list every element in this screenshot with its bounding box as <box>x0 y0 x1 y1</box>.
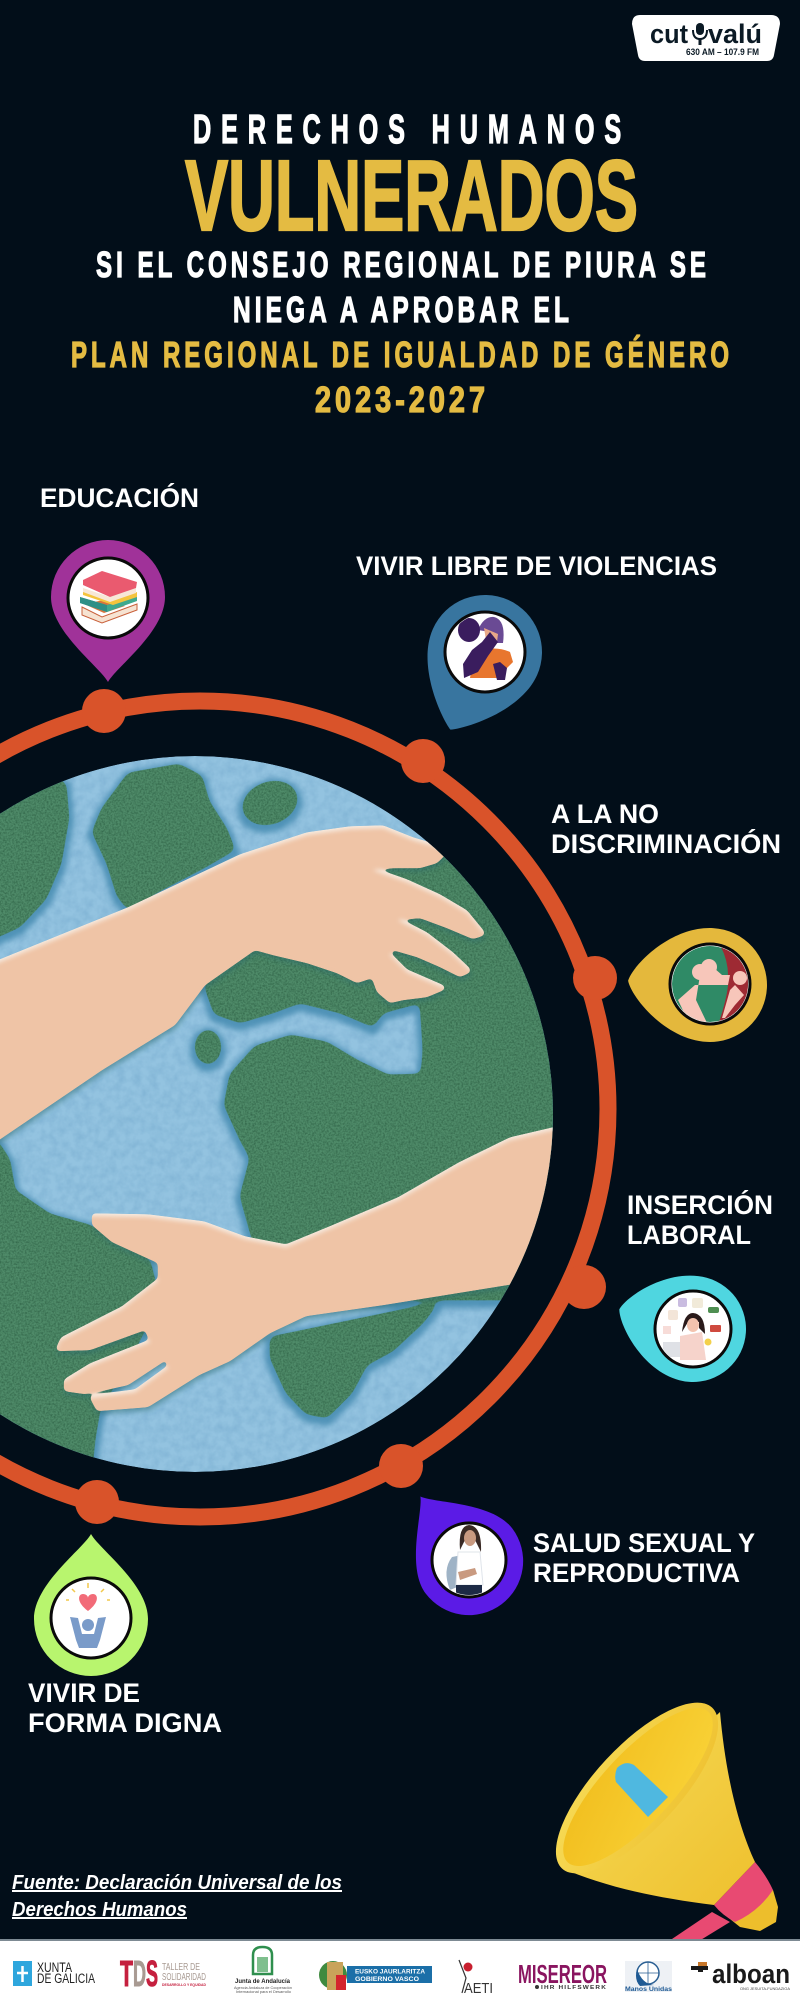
land masses <box>0 764 553 1458</box>
logo: Taller de Solidaridad: SOLIDARIDAD <box>162 1972 206 1983</box>
label: vivir de forma digna <box>28 1678 222 1738</box>
logo: Taller de Solidaridad: S <box>146 1953 158 1994</box>
logo: Eusko Jaurlaritza: EUSKO JAURLARITZA <box>355 1968 425 1976</box>
logo: Misereor: IHR HILFSWERK <box>541 1985 607 1991</box>
label: salud sexual y reproductiva: REPRODUCTIVA <box>533 1558 740 1588</box>
logo: Alboan: alboan <box>712 1959 790 1989</box>
label: educación: EDUCACIÓN <box>40 482 199 513</box>
node: no discriminación <box>573 956 617 1000</box>
logo: Eusko Jaurlaritza: GOBIERNO VASCO <box>355 1976 419 1983</box>
label: vivir de forma digna: VIVIR DE <box>28 1678 140 1708</box>
node: violencias <box>401 739 445 783</box>
logo: Taller de Solidaridad: T <box>120 1953 133 1994</box>
label: a la no discriminación <box>551 799 781 859</box>
subheading line 2: NIEGA A APROBAR EL <box>233 289 573 330</box>
label: vivir libre de violencias: VIVIR LIBRE DE VIOLENCIAS <box>356 551 717 581</box>
logo: Junta de Andalucía: Junta de Andalucía <box>235 1978 290 1985</box>
label: inserción laboral: LABORAL <box>627 1220 751 1250</box>
source note: Derechos Humanos <box>12 1899 187 1921</box>
arm shadows <box>0 857 510 1416</box>
logo: Misereor <box>518 1961 607 1991</box>
pin: vivir de forma digna <box>34 1534 148 1676</box>
logo: Alboan: ONG JESUITA-FUNDAZIOA <box>740 1986 790 1991</box>
label: salud sexual y reproductiva <box>533 1528 755 1588</box>
logo: Junta de Andalucía <box>234 1947 292 1994</box>
logo: Taller de Solidaridad: D <box>133 1953 146 1994</box>
logo: Taller de Solidaridad: DESARROLLO Y EQUIDAD <box>162 1982 206 1987</box>
icon: books <box>80 571 137 623</box>
logo: Eusko Jaurlaritza <box>319 1961 432 1990</box>
icon: violence against a woman <box>458 617 513 680</box>
logo: Xunta de Galicia: DE GALICIA <box>37 1971 95 1986</box>
logo: Junta de Andalucía: Internacional para el Desarrollo <box>236 1990 291 1994</box>
orbit ring with nodes <box>0 689 617 1524</box>
node: educación <box>82 689 126 733</box>
logo: Xunta de Galicia: XUNTA <box>37 1960 72 1975</box>
pin: no discriminación <box>625 924 770 1045</box>
pin: educación <box>51 540 165 682</box>
pin: salud sexual y reproductiva <box>416 1496 524 1616</box>
logo: Manos Unidas <box>625 1961 673 1993</box>
illustration: globe embraced by arms <box>0 756 553 1472</box>
logo: Xunta de Galicia <box>13 1960 95 1986</box>
logo: PAETI <box>459 1960 493 1997</box>
icon: person with heart <box>66 1583 110 1648</box>
logo: Radio Cutivalú: 630 AM – 107.9 FM <box>686 47 759 58</box>
node: salud sexual <box>379 1444 423 1488</box>
icon: megaphone <box>531 1679 778 1941</box>
arm: lower, hand to the left <box>56 1124 570 1411</box>
label: a la no discriminación: A LA NO <box>551 799 659 829</box>
label: a la no discriminación: DISCRIMINACIÓN <box>551 828 781 859</box>
land edge wash <box>0 759 553 1460</box>
logo strip <box>0 1939 800 2000</box>
icon: embracing figures <box>672 945 750 1025</box>
label: salud sexual y reproductiva: SALUD SEXUAL Y <box>533 1528 755 1558</box>
source note <box>12 1872 342 1921</box>
logo: Manos Unidas: Manos Unidas <box>625 1987 673 1993</box>
label: inserción laboral: INSERCIÓN <box>627 1189 773 1220</box>
title block <box>71 106 733 420</box>
arm: upper, hand to the right <box>0 826 485 1146</box>
logo: Radio Cutivalú: valú <box>708 19 762 49</box>
logo: Taller de Solidaridad <box>120 1953 206 1994</box>
ocean <box>0 756 553 1472</box>
node: vivir de forma digna <box>75 1480 119 1524</box>
logo: Taller de Solidaridad: TALLER DE <box>162 1962 200 1973</box>
pin: inserción laboral <box>619 1276 746 1382</box>
node: inserción laboral <box>562 1265 606 1309</box>
label: vivir de forma digna: FORMA DIGNA <box>28 1708 222 1738</box>
logo: Junta de Andalucía: Agencia Andaluza de Cooperación <box>234 1986 292 1990</box>
logo: Misereor: MISEREOR <box>518 1961 607 1989</box>
logo: PAETI: AETI <box>464 1980 493 1997</box>
pin: violencias <box>428 595 542 730</box>
logo: Alboan <box>691 1959 790 1991</box>
label: inserción laboral <box>627 1189 773 1250</box>
logo: Radio Cutivalú <box>632 15 780 61</box>
source note: Fuente: Declaración Universal de los <box>12 1872 342 1894</box>
logo: Radio Cutivalú: cut <box>650 19 688 49</box>
icon: young woman with backpack <box>446 1525 483 1599</box>
plan years: 2023-2027 <box>315 379 489 420</box>
icon: woman with work items <box>663 1298 721 1360</box>
